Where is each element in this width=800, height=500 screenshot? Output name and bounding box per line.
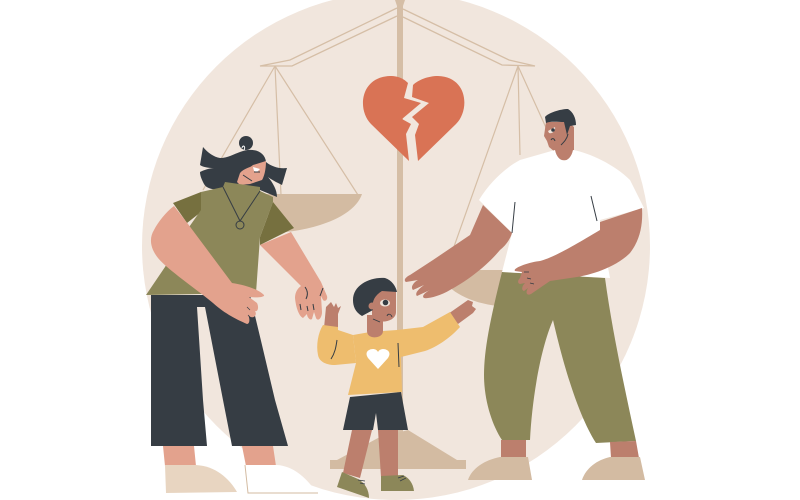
child <box>317 278 476 498</box>
child neck <box>367 315 383 337</box>
woman sleeves <box>173 192 294 245</box>
woman pants <box>151 295 288 446</box>
woman right arm <box>151 206 264 324</box>
background circle <box>142 0 650 500</box>
woman <box>146 136 327 493</box>
woman left arm <box>260 232 327 320</box>
woman legs <box>163 446 276 466</box>
man pants <box>484 272 636 443</box>
man left arm <box>515 208 642 295</box>
man right arm <box>405 205 512 298</box>
child shorts <box>343 392 408 430</box>
child hands <box>324 300 476 330</box>
woman shoe right <box>245 465 318 493</box>
man <box>405 109 645 480</box>
balance scale <box>203 0 548 469</box>
icon: white heart on shirt <box>367 349 389 369</box>
child head <box>353 278 397 322</box>
child shoes <box>337 472 414 498</box>
child shirt <box>317 312 460 395</box>
woman hair and head <box>200 136 287 197</box>
woman necklace <box>223 187 260 229</box>
icon: broken heart <box>363 76 464 161</box>
man shirt <box>479 150 644 278</box>
child legs <box>343 430 398 478</box>
man shoes <box>468 457 645 480</box>
woman shoe left <box>165 465 237 493</box>
man shirt creases <box>512 196 597 233</box>
man ankles <box>501 440 639 458</box>
woman shirt <box>146 182 273 295</box>
man head and neck <box>544 109 576 160</box>
child sleeve creases <box>331 340 399 367</box>
